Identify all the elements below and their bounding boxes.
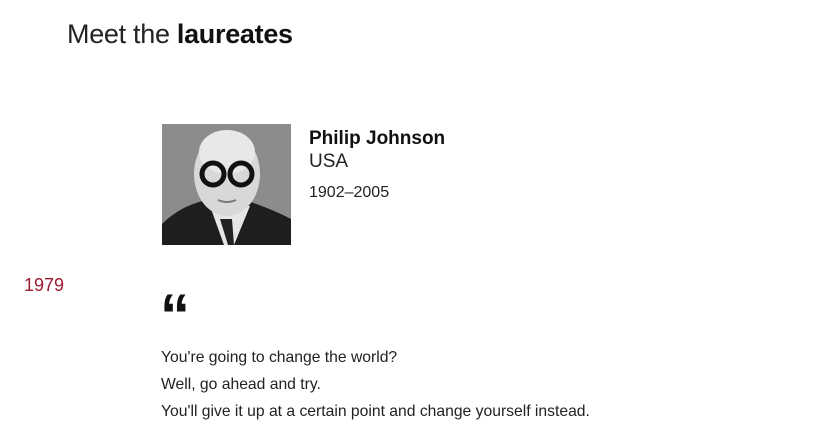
name block: 1902–2005 — [309, 184, 389, 201]
title: Meet the laureates — [67, 19, 293, 49]
quote mark icon: “ — [160, 282, 190, 349]
name block: USA — [309, 151, 348, 172]
quote text — [161, 349, 590, 420]
quote text: Well, go ahead and try. — [161, 376, 321, 393]
year label: 1979 — [24, 275, 64, 295]
quote text: You're going to change the world? — [161, 349, 397, 366]
name block: Philip Johnson — [309, 128, 445, 149]
quote text: You'll give it up at a certain point and change yourself instead. — [161, 403, 590, 420]
portrait photo — [162, 124, 291, 245]
name block — [309, 128, 445, 201]
